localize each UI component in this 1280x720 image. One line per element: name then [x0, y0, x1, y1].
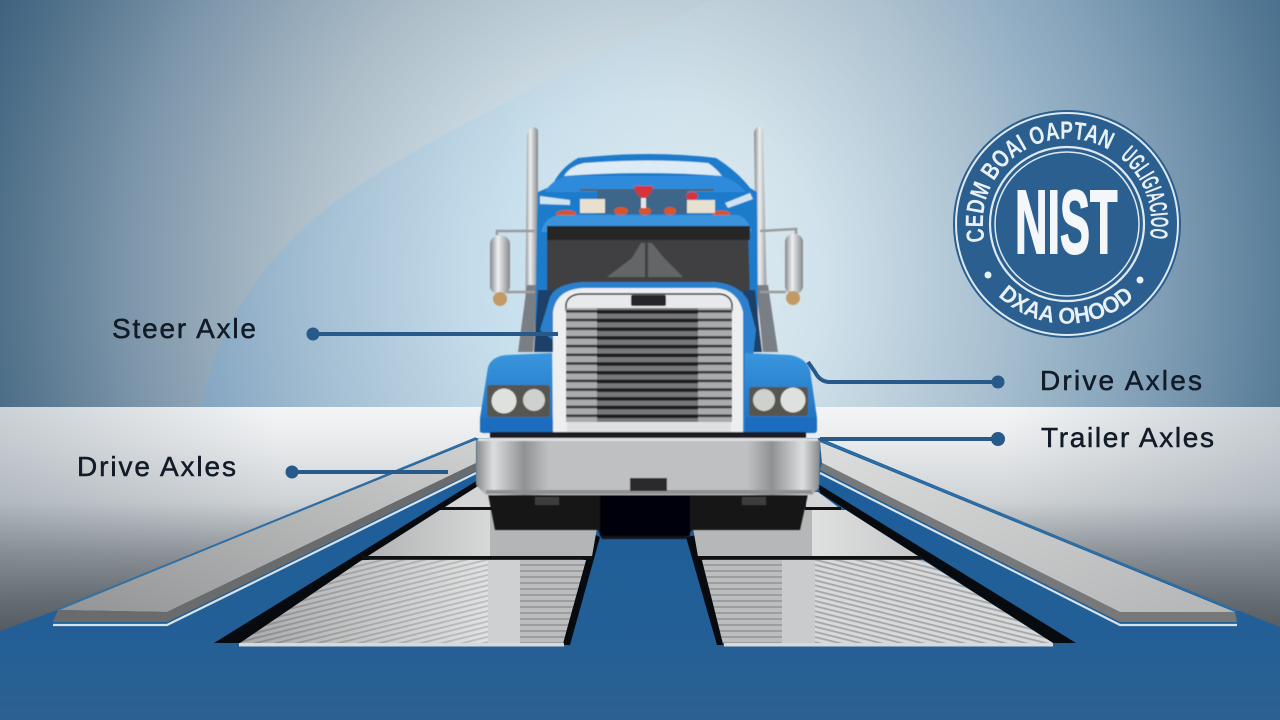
truck [476, 126, 820, 539]
callout: Drive Axles right [808, 362, 1202, 396]
hood badge [631, 295, 666, 306]
background: curved swoosh [202, 0, 1280, 407]
deck divider [700, 556, 922, 560]
deck plate: front shading [240, 560, 490, 643]
leader line [292, 470, 448, 474]
deck edge shadows [214, 480, 600, 645]
leader dot [992, 376, 1004, 388]
right side rail [820, 440, 1237, 625]
deck plate: middle [368, 510, 600, 556]
deck divider [805, 507, 841, 510]
front bumper [476, 438, 820, 495]
deck front edge [724, 643, 1053, 646]
right scale deck [686, 484, 1076, 646]
tire reflection: middle [690, 510, 812, 556]
seal ring text: UGLIGIACIOO [1122, 145, 1168, 239]
left mirror [490, 231, 535, 306]
seal ring text: CEDM BOAI OAPTAN [966, 122, 1116, 242]
deck plate: front tread [240, 560, 586, 643]
tires and undercarriage [488, 494, 808, 539]
deck plate: top [806, 492, 838, 507]
dark cab sides [534, 290, 762, 352]
tire reflection: front [700, 559, 815, 644]
windshield [547, 226, 750, 292]
deck plate: front tread [702, 560, 1053, 643]
leader dot [306, 328, 320, 340]
marker lights [556, 186, 730, 218]
label: Trailer Axles [1041, 422, 1214, 453]
grille louvers [566, 308, 732, 422]
tire reflection: middle [490, 510, 602, 556]
seal ring text [966, 122, 1168, 324]
NIST seal [953, 110, 1181, 338]
right mirror [760, 229, 803, 305]
deck divider [362, 556, 592, 560]
grille top panel [566, 294, 732, 310]
deck edge shadows [686, 484, 1076, 645]
cab roof [535, 154, 758, 340]
floor [0, 407, 1280, 647]
callout: Steer Axle [112, 313, 558, 344]
seal NIST wordmark: NIST [1015, 173, 1117, 273]
deck plate: middle [690, 510, 918, 556]
deck divider [441, 507, 493, 510]
tire reflection: front [488, 559, 590, 644]
leader dot [991, 432, 1005, 446]
leader line [820, 437, 998, 441]
left scale deck [214, 480, 602, 646]
label: Steer Axle [112, 313, 256, 344]
leader dot [286, 466, 298, 478]
shadow under hood [490, 432, 806, 438]
exhaust stack: left [525, 127, 538, 350]
label: Drive Axles [77, 451, 236, 482]
leader line [313, 332, 558, 336]
lower stack brackets [518, 285, 778, 352]
hood and grille surround [540, 282, 756, 432]
callout: Drive Axles left [77, 451, 448, 482]
left fender [480, 353, 553, 433]
blue platform base [0, 438, 1280, 720]
left side rail [53, 438, 476, 625]
grille bottom lip [567, 422, 731, 433]
seal ring text: DXAA OHOOD [999, 284, 1132, 324]
deck front edge [239, 643, 564, 646]
leader line [808, 362, 998, 382]
exhaust stack: right [754, 126, 768, 350]
bumper plate [630, 478, 667, 491]
label: Drive Axles [1040, 365, 1202, 396]
right fender [745, 353, 817, 433]
deck plate: top [445, 486, 492, 507]
seal dots [984, 272, 992, 278]
callout: Trailer Axles [820, 422, 1214, 453]
visor placards [580, 199, 605, 213]
visor band [541, 215, 752, 232]
background: sky gradient [0, 0, 1280, 408]
